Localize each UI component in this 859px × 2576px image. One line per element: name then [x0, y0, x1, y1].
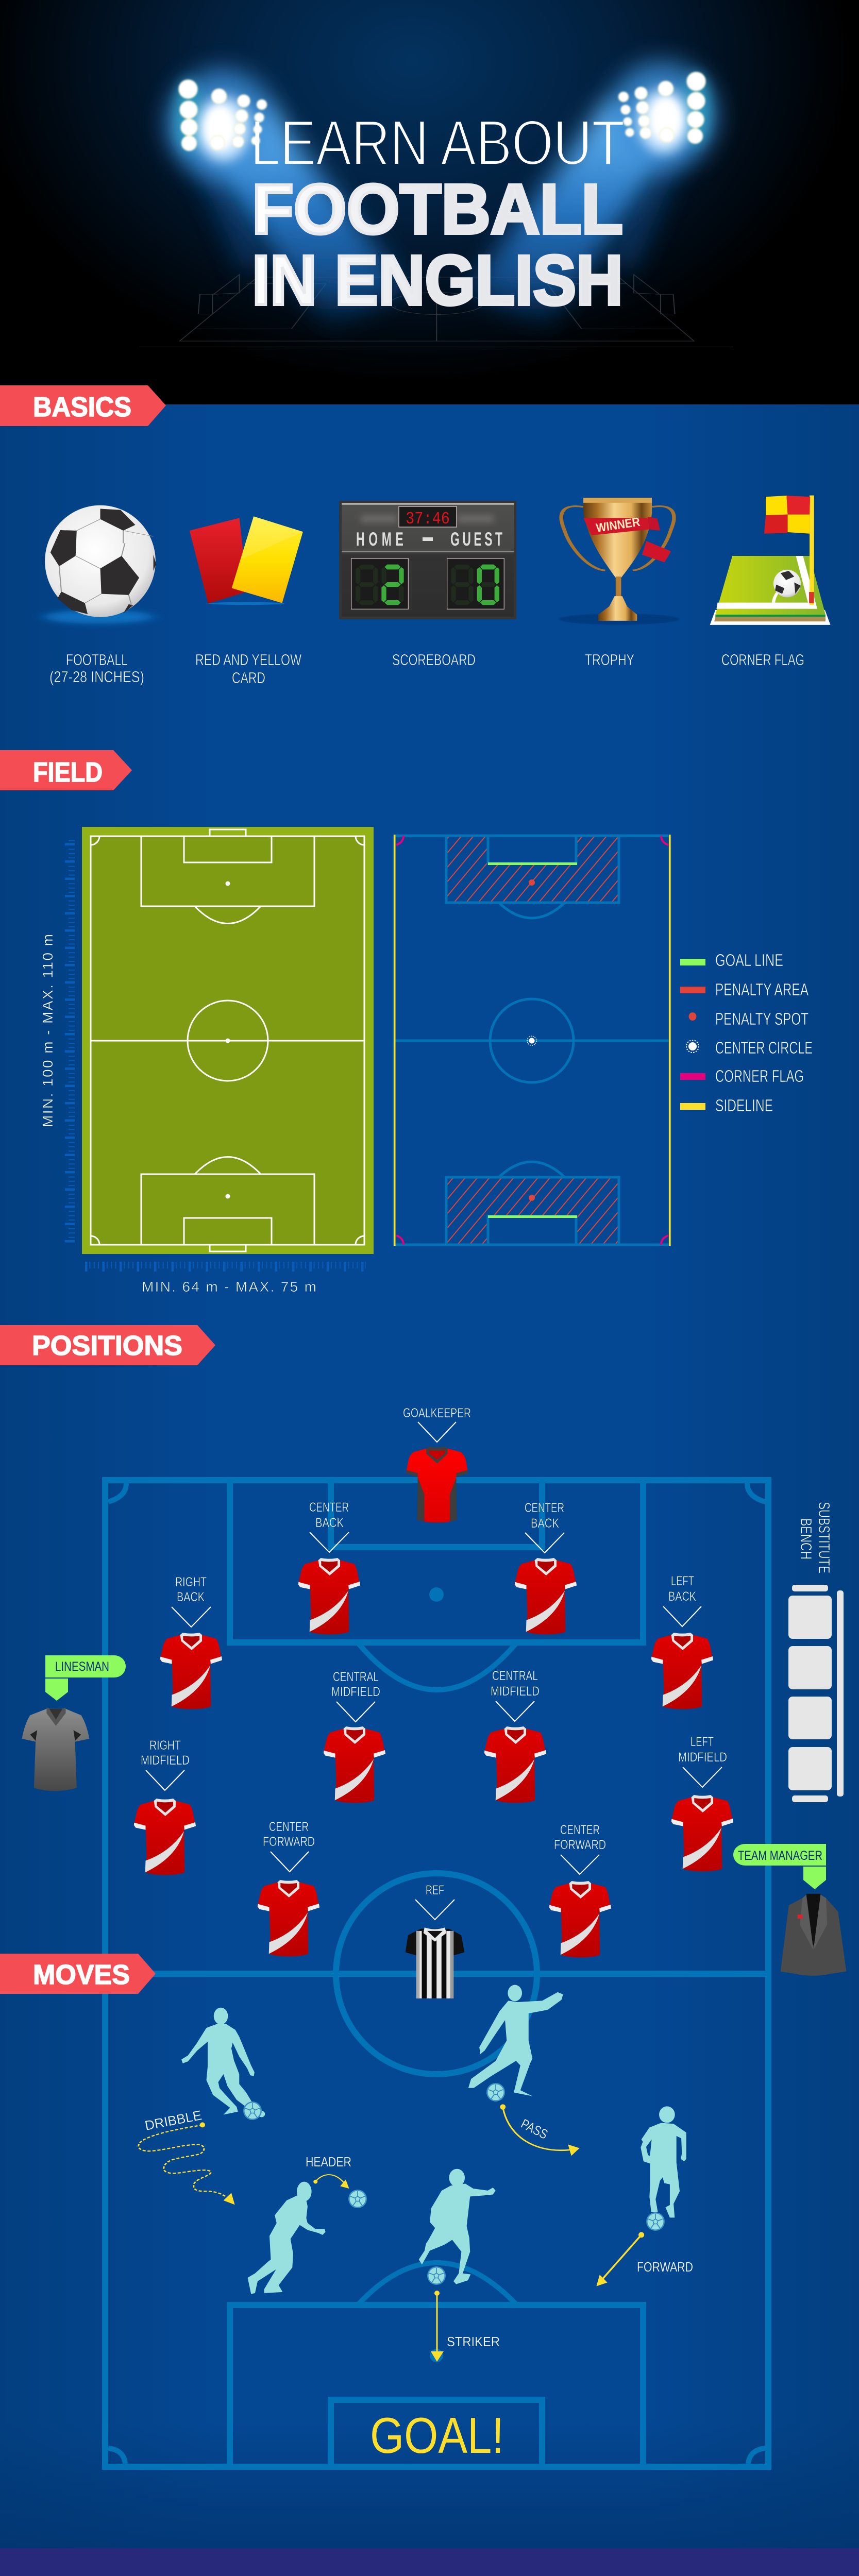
player: right midfield: RIGHT: [149, 1738, 181, 1753]
icon: trophy: WINNER: [595, 515, 641, 535]
player: center forward right: FORWARD: [554, 1838, 606, 1852]
section tab: basics: [0, 385, 166, 426]
chart: green pitch diagram: [82, 827, 374, 1254]
player: center back right: [515, 1501, 577, 1634]
player: right back: RIGHT: [175, 1575, 207, 1589]
header: stadium night scene: [0, 0, 859, 404]
legend: [680, 951, 813, 1115]
basics labels: [49, 651, 804, 687]
move: pass: PASS: [518, 2116, 550, 2142]
section tab: moves: [0, 1954, 156, 1994]
icon: red and yellow card: [190, 516, 303, 605]
title: LEARN ABOUT: [250, 108, 625, 179]
player: referee: [406, 1883, 464, 1998]
ruler: pitch height: [70, 838, 72, 1243]
move: header: HEADER: [306, 2154, 351, 2170]
icon: scoreboard: 37:46: [406, 510, 450, 529]
player: left back: LEFT: [671, 1574, 694, 1588]
digit panels: [351, 558, 504, 609]
icon: scoreboard: GUEST: [450, 528, 502, 550]
title: [250, 108, 625, 320]
section tab: positions: POSITIONS: [32, 1330, 182, 1361]
floodlights right: [618, 72, 705, 143]
player: center back left: BACK: [315, 1516, 344, 1530]
legend: SIDELINE: [715, 1096, 773, 1115]
substitute bench: SUBSTITUTE: [815, 1502, 833, 1573]
icon: trophy: [559, 498, 679, 624]
move: striker: [419, 2169, 500, 2362]
move: header: [248, 2154, 367, 2294]
basics labels: TROPHY: [585, 651, 634, 669]
chart: labelled pitch diagram: [394, 835, 671, 1246]
player: central midfield right: [484, 1669, 546, 1803]
official: linesman: [22, 1655, 126, 1791]
icon: corner flag: [710, 496, 831, 625]
silhouette: passing player: [468, 1985, 563, 2096]
player: central midfield right: MIDFIELD: [491, 1684, 540, 1699]
move: forward: [596, 2106, 693, 2286]
legend: GOAL LINE: [715, 951, 783, 970]
goal text: GOAL!: [370, 2407, 504, 2464]
player: goalkeeper: [403, 1406, 471, 1522]
legend: CORNER FLAG: [715, 1066, 804, 1086]
move: striker: STRIKER: [447, 2334, 500, 2349]
official: team manager: [733, 1844, 846, 1976]
player: left back: BACK: [668, 1589, 696, 1604]
section tab: positions: [0, 1325, 215, 1365]
title: FOOTBALL: [252, 170, 623, 249]
move: dribble: DRIBBLE: [143, 2107, 203, 2133]
legend: PENALTY AREA: [715, 980, 809, 999]
player: center back left: [298, 1500, 360, 1634]
player: left midfield: LEFT: [690, 1735, 714, 1749]
player: referee: REF: [426, 1883, 444, 1897]
player: center forward left: [258, 1820, 319, 1956]
official: linesman: LINESMAN: [55, 1659, 109, 1674]
title: IN ENGLISH: [252, 241, 623, 320]
basics labels: CORNER FLAG: [721, 651, 804, 669]
section tab: field: [0, 750, 132, 790]
move: forward: FORWARD: [637, 2259, 693, 2275]
player: left back: [651, 1574, 713, 1709]
silhouette: dribbling player: [181, 2008, 265, 2117]
player: goalkeeper: GOALKEEPER: [403, 1406, 471, 1420]
legend: CENTER CIRCLE: [715, 1038, 813, 1057]
substitute bench: [788, 1502, 844, 1802]
icon: scoreboard: [339, 501, 516, 619]
player: central midfield left: CENTRAL: [333, 1670, 379, 1684]
floodlights left: [179, 80, 267, 150]
player: right back: BACK: [177, 1590, 205, 1604]
player: center forward right: [549, 1823, 611, 1957]
icon: scoreboard: HOME: [356, 528, 403, 550]
footer band: [0, 2548, 859, 2576]
player: central midfield left: MIDFIELD: [331, 1685, 380, 1699]
basics labels: FOOTBALL: [66, 651, 128, 669]
basics labels: SCOREBOARD: [392, 651, 476, 669]
silhouette: forward player: [641, 2106, 686, 2217]
official: team manager: TEAM MANAGER: [738, 1849, 822, 1863]
section tab: basics: BASICS: [33, 392, 131, 422]
section tab: field: FIELD: [33, 757, 103, 788]
basics labels: (27-28 INCHES): [49, 668, 144, 686]
player: center forward left: CENTER: [269, 1820, 309, 1834]
player: left midfield: [671, 1735, 733, 1871]
faint pitch outline: [140, 275, 733, 347]
floodlight beams: [167, 62, 716, 330]
move: dribble: [139, 2008, 265, 2205]
player: center back right: CENTER: [525, 1501, 564, 1515]
formation pitch lines: [105, 1480, 768, 2467]
player: right back: [160, 1575, 222, 1709]
silhouette: heading player: [248, 2182, 326, 2294]
section tab: moves: MOVES: [33, 1959, 130, 1990]
move: pass: [468, 1985, 580, 2156]
dimension label: length: MIN. 100 m - MAX. 110 m: [40, 934, 56, 1127]
legend: PENALTY SPOT: [715, 1009, 809, 1028]
player: right midfield: [134, 1738, 196, 1875]
player: center back left: CENTER: [309, 1500, 349, 1515]
substitute bench: BENCH: [797, 1518, 815, 1560]
basics labels: RED AND YELLOW: [195, 651, 302, 669]
player: center forward right: CENTER: [560, 1823, 600, 1837]
player: center back right: BACK: [531, 1516, 559, 1531]
dimension label: width: MIN. 64 m - MAX. 75 m: [142, 1279, 316, 1295]
ruler: pitch width: [85, 1265, 366, 1266]
player: right midfield: MIDFIELD: [141, 1753, 190, 1768]
basics labels: CARD: [232, 669, 265, 687]
player: central midfield left: [324, 1670, 385, 1803]
player: center forward left: FORWARD: [263, 1835, 315, 1849]
icon: football: [44, 505, 156, 624]
player: central midfield right: CENTRAL: [492, 1669, 538, 1683]
player: left midfield: MIDFIELD: [678, 1750, 727, 1765]
silhouette: striking player: [419, 2169, 496, 2284]
